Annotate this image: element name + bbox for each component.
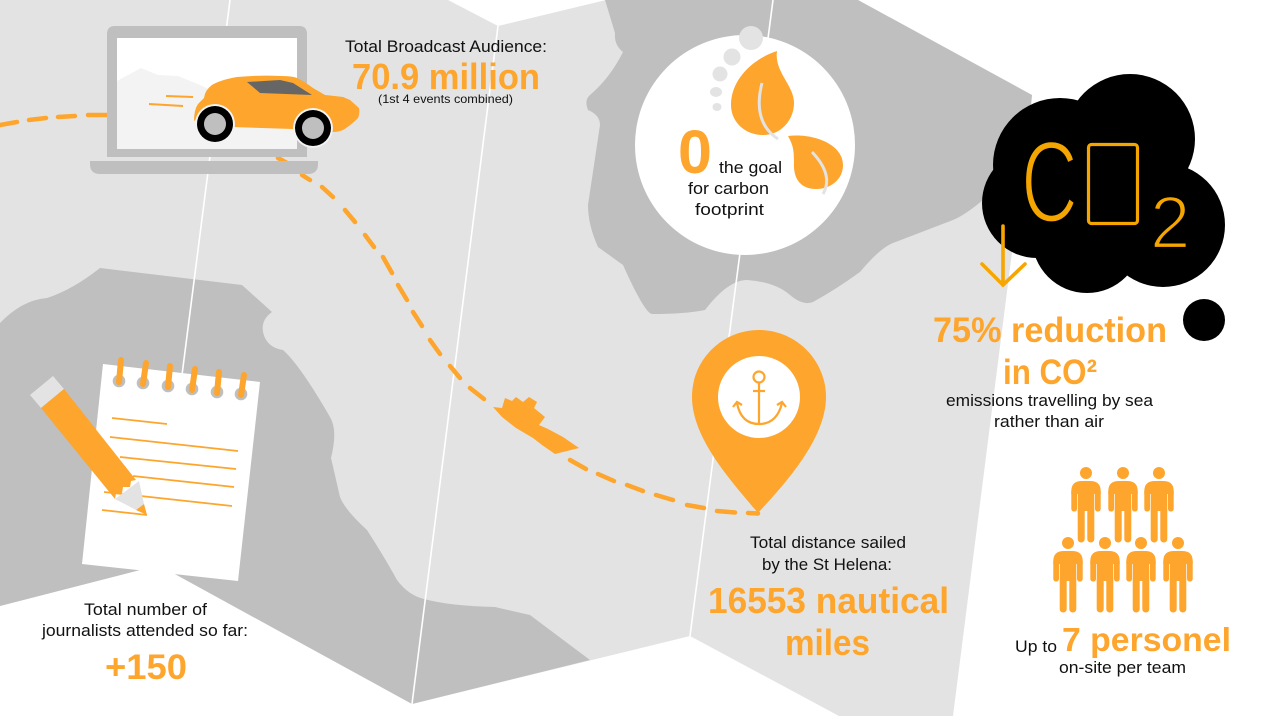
text block: personnel: Up to [1015,637,1057,656]
text block: distance sailed: by the St Helena: [762,555,892,574]
text block: broadcast audience: Total Broadcast Audience: [345,37,547,56]
icon: CO2 cloud [982,74,1225,341]
icon: CO2 cloud: C [1021,118,1078,248]
text block: journalists: +150 [105,648,187,687]
text block: journalists: Total number of [84,600,207,619]
text block: distance sailed: Total distance sailed [750,533,906,552]
map fold lines [182,0,773,704]
text block: CO2 reduction: rather than air [994,412,1104,431]
panel: carbon footprint circle: for carbon [688,179,769,198]
panel: carbon footprint circle: 0 [678,118,712,186]
icon: CO2 cloud: 2 [1150,181,1190,264]
panel: carbon footprint circle: the goal [719,158,782,177]
text block: CO2 reduction: emissions travelling by sea [946,391,1154,410]
icon: location pin with anchor [692,330,826,513]
dashed route: laptop to pin [278,158,758,514]
text block: broadcast audience: 70.9 million [352,56,540,97]
text block: personnel [1015,621,1231,677]
text block: broadcast audience: (1st 4 events combined) [378,92,513,106]
icon: car [149,76,359,148]
text block: CO2 reduction [933,311,1167,431]
text block: personnel: on-site per team [1059,658,1186,677]
panel: carbon footprint circle [635,26,855,255]
panel: carbon footprint circle: footprint [695,200,764,219]
icon: notebook and pencil [30,360,260,581]
text block: broadcast audience [345,37,547,106]
text block: journalists [41,600,248,687]
icon: laptop [90,26,318,174]
text block: journalists: journalists attended so far: [41,621,248,640]
text block: distance sailed [708,533,949,663]
land mass: upper right [586,0,1032,314]
dashed route: start to laptop [0,115,107,125]
text block: personnel: 7 personel [1062,621,1231,658]
arrow: reduction down arrow [982,226,1025,285]
text block: CO2 reduction: 75% reduction [933,311,1167,350]
icon: ship [493,397,579,454]
icon: seven people [1053,467,1193,612]
text block: CO2 reduction: in CO² [1003,353,1097,392]
text block: distance sailed: 16553 nautical [708,580,949,621]
land mass: lower left [0,268,590,704]
text block: distance sailed: miles [785,622,870,663]
